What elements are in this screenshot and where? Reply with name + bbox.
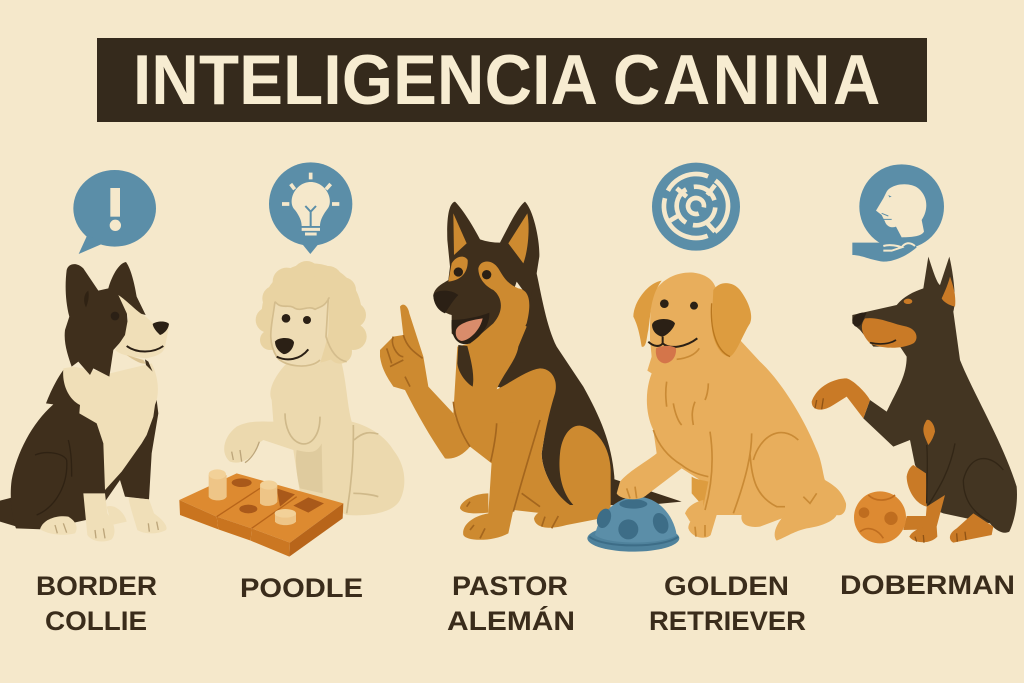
icon: exclamation speech bubble bbox=[73, 170, 156, 254]
label: golden retriever: GOLDEN bbox=[664, 571, 789, 601]
panel: golden retriever bbox=[617, 162, 846, 541]
panel: pastor aleman bbox=[380, 202, 682, 552]
dog: doberman bbox=[812, 257, 1017, 543]
panel: doberman bbox=[812, 164, 1017, 543]
puzzle toy bbox=[179, 469, 343, 557]
dog: border collie bbox=[0, 262, 169, 541]
icon: light bulb badge bbox=[269, 162, 352, 254]
label: doberman: DOBERMAN bbox=[840, 570, 1015, 600]
dog: german shepherd bbox=[380, 202, 682, 540]
label: golden retriever: RETRIEVER bbox=[649, 606, 806, 636]
icon: maze badge bbox=[652, 162, 740, 251]
icon: blue treat bowl bbox=[587, 497, 679, 552]
label: pastor aleman: ALEMÁN bbox=[447, 605, 575, 636]
icon: head and hand badge bbox=[852, 164, 944, 262]
panel: border collie bbox=[0, 170, 169, 541]
label: golden retriever bbox=[649, 571, 806, 636]
title banner bbox=[97, 38, 927, 122]
label: pastor aleman: PASTOR bbox=[452, 571, 568, 601]
label: pastor aleman bbox=[447, 571, 575, 636]
panel: poodle bbox=[179, 162, 404, 557]
title banner: CANINA bbox=[613, 41, 880, 120]
title banner: INTELIGENCIA bbox=[133, 41, 598, 120]
dog: golden retriever bbox=[617, 273, 846, 541]
label: poodle: POODLE bbox=[240, 573, 363, 603]
dog: poodle bbox=[224, 261, 404, 515]
label: border collie bbox=[36, 571, 157, 636]
icon: orange ball bbox=[854, 491, 906, 543]
label: border collie: BORDER bbox=[36, 571, 157, 601]
label: border collie: COLLIE bbox=[45, 606, 147, 636]
